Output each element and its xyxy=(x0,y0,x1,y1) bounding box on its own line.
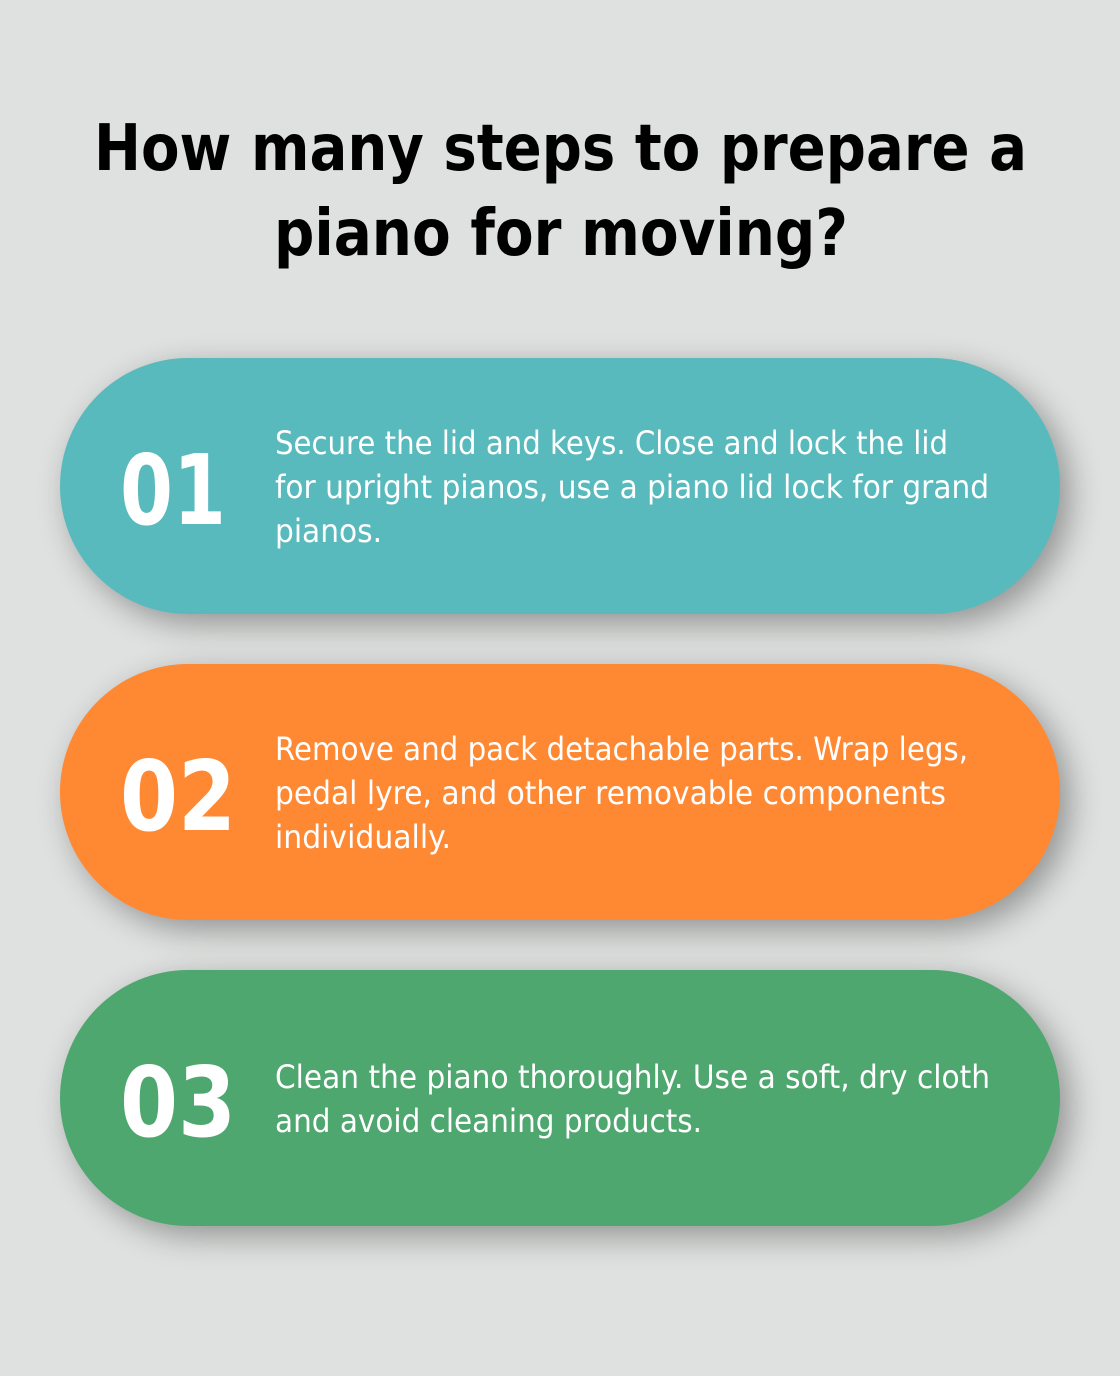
step 03 description xyxy=(275,1058,990,1140)
step 02 description: individually. xyxy=(275,818,451,856)
title xyxy=(94,112,1027,271)
step 01 description: pianos. xyxy=(275,512,382,550)
step 02 description: Remove and pack detachable parts. Wrap legs, xyxy=(275,730,968,768)
step number 03: 03 xyxy=(120,1046,236,1159)
title: piano for moving? xyxy=(274,197,848,271)
step number 01: 01 xyxy=(120,434,226,547)
step 02 description: pedal lyre, and other removable components xyxy=(275,774,946,812)
step 02 description xyxy=(275,730,968,856)
step number 02: 02 xyxy=(120,740,236,853)
panel: step 03 xyxy=(60,970,1070,1236)
step 01 description: for upright pianos, use a piano lid lock for grand xyxy=(275,468,989,506)
step 01 description: Secure the lid and keys. Close and lock the lid xyxy=(275,424,948,462)
panel: step 02 xyxy=(60,664,1070,930)
step 01 description xyxy=(275,424,989,550)
step 03 description: Clean the piano thoroughly. Use a soft, dry cloth xyxy=(275,1058,990,1096)
step 03 description: and avoid cleaning products. xyxy=(275,1102,702,1140)
panel: step 01 xyxy=(60,358,1070,624)
